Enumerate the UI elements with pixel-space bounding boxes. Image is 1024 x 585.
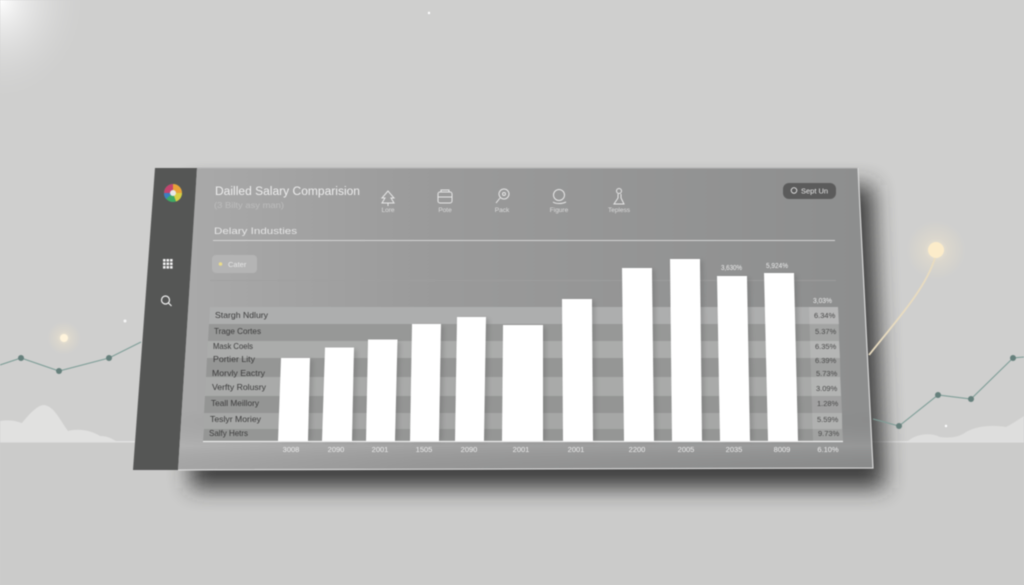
year labels: 2090 bbox=[461, 445, 477, 454]
button: sign up: Sept Un bbox=[801, 186, 828, 196]
line chart right bbox=[873, 355, 1024, 429]
bar value labels: 3,03% bbox=[813, 296, 832, 305]
bar value labels: 5,924% bbox=[766, 261, 788, 270]
icon: globe bbox=[550, 190, 569, 214]
button: sign up bbox=[783, 183, 836, 199]
icon: box: Pote bbox=[438, 207, 452, 214]
icon: box bbox=[438, 190, 452, 214]
industry labels bbox=[209, 310, 269, 438]
panel shadow bbox=[190, 185, 885, 488]
glow connector line bbox=[869, 220, 966, 355]
percent column: 5.59% bbox=[817, 415, 839, 424]
icon: tree: Lore bbox=[381, 207, 395, 214]
percent column: 1.28% bbox=[817, 399, 839, 408]
percent column: 5.73% bbox=[816, 369, 838, 378]
year labels: 2200 bbox=[629, 445, 645, 454]
icon: magnifier bbox=[495, 189, 510, 214]
bar value labels bbox=[721, 261, 832, 305]
filter chip: Cater bbox=[228, 260, 247, 269]
percent column: 6.34% bbox=[814, 311, 836, 320]
clouds right bbox=[908, 416, 1024, 441]
year labels: 2001 bbox=[372, 445, 388, 454]
year labels: 3008 bbox=[283, 445, 299, 454]
industry labels: Teslyr Moriey bbox=[210, 414, 262, 424]
year labels: 2001 bbox=[513, 445, 529, 454]
industry labels: Mask Coels bbox=[213, 341, 253, 351]
icon: pawn bbox=[608, 188, 631, 214]
year labels: 8009 bbox=[774, 445, 790, 454]
industry labels: Verfty Rolusry bbox=[212, 382, 267, 392]
icon: globe: Figure bbox=[550, 207, 569, 214]
x axis line bbox=[203, 440, 843, 442]
icon: pawn: Tepless bbox=[608, 207, 631, 214]
industry labels: Trage Cortes bbox=[214, 326, 261, 336]
industry labels: Morvly Eactry bbox=[212, 368, 266, 378]
filter chip bbox=[212, 255, 257, 273]
industry labels: Salfy Hetrs bbox=[209, 428, 248, 438]
subtitle: (3 Bilty asy man) bbox=[214, 200, 284, 210]
percent column: 6.39% bbox=[815, 356, 837, 365]
year labels: 6.10% bbox=[817, 445, 839, 454]
industry labels: Stargh Ndlury bbox=[215, 310, 269, 320]
line chart left bbox=[0, 342, 141, 374]
icon: search bbox=[162, 296, 172, 306]
icon: tree bbox=[381, 191, 395, 214]
sidebar bbox=[133, 168, 197, 470]
percent column bbox=[814, 311, 840, 438]
bar chart bbox=[278, 259, 798, 441]
chart bands bbox=[203, 307, 843, 441]
clouds left bbox=[0, 405, 116, 441]
icon: magnifier: Pack bbox=[495, 207, 510, 214]
bar shadows bbox=[281, 261, 801, 441]
year labels bbox=[283, 445, 839, 454]
year labels: 2005 bbox=[678, 445, 694, 454]
icon: grid bbox=[163, 259, 173, 269]
section heading: Delary Industies bbox=[214, 226, 297, 237]
percent column: 6.35% bbox=[815, 342, 837, 351]
title: Dailled Salary Comparision bbox=[215, 186, 360, 198]
main panel bbox=[178, 168, 873, 470]
percent column: 5.37% bbox=[815, 327, 837, 336]
year labels: 2035 bbox=[726, 445, 742, 454]
industry labels: Teall Meillory bbox=[211, 398, 260, 408]
percent column: 9.73% bbox=[818, 429, 840, 438]
bar value labels: 3,630% bbox=[721, 263, 742, 272]
percent column: 3.09% bbox=[816, 384, 838, 393]
year labels: 1505 bbox=[416, 445, 432, 454]
industry labels: Portier Lity bbox=[213, 354, 256, 364]
year labels: 2001 bbox=[568, 445, 584, 454]
year labels: 2090 bbox=[328, 445, 344, 454]
icon: colour logo bbox=[164, 184, 182, 202]
glow dot left bbox=[47, 320, 126, 355]
